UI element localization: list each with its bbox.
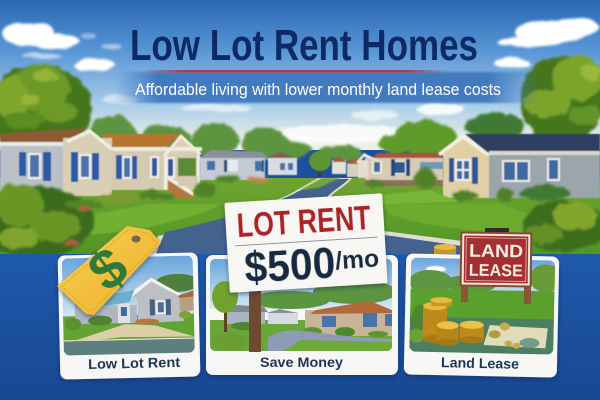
card: land lease bbox=[404, 253, 562, 378]
land lease sign bbox=[460, 228, 532, 304]
background tree line bbox=[88, 113, 525, 161]
title: Low Lot Rent Homes bbox=[130, 21, 478, 70]
card label: Land Lease bbox=[441, 354, 519, 372]
big tree left bbox=[0, 64, 92, 152]
coin stacks bbox=[422, 297, 484, 347]
sky background bbox=[0, 0, 600, 150]
subtitle: Affordable living with lower monthly land lease costs bbox=[135, 80, 501, 99]
lawn patches bbox=[72, 178, 545, 236]
lawn ground bbox=[0, 178, 600, 258]
card: low lot rent bbox=[58, 252, 201, 380]
far houses bbox=[198, 150, 366, 180]
sign heading: LOT RENT bbox=[236, 199, 372, 245]
sign post bbox=[249, 286, 261, 352]
card label: Low Lot Rent bbox=[88, 354, 181, 372]
subtitle band bbox=[115, 72, 540, 103]
sign text: LAND bbox=[469, 241, 523, 261]
house: left bbox=[0, 128, 202, 198]
lot rent sign: /mo bbox=[334, 245, 380, 275]
lower blue panel bbox=[0, 254, 600, 400]
land lease sign: LEASE bbox=[469, 261, 523, 280]
road bbox=[150, 178, 470, 256]
sign price: $500 bbox=[243, 238, 337, 293]
card label: Save Money bbox=[260, 354, 343, 370]
red accent line bbox=[140, 70, 450, 72]
house: right bbox=[438, 134, 600, 198]
card image: house bbox=[62, 255, 201, 356]
card image: coins on lawn bbox=[407, 257, 562, 356]
shrubs near houses bbox=[98, 167, 569, 203]
coins peeking behind card bbox=[434, 244, 456, 254]
clouds bbox=[2, 18, 599, 143]
card image: neighbourhood bbox=[210, 259, 397, 352]
lot rent sign bbox=[224, 193, 388, 294]
dollar sign: $ bbox=[76, 234, 139, 303]
house: centre right bbox=[356, 153, 443, 186]
big tree right bbox=[520, 56, 600, 144]
card: save money bbox=[206, 255, 398, 375]
large bush right bbox=[523, 200, 600, 252]
center small tree bbox=[309, 151, 331, 177]
large bush left bbox=[0, 184, 105, 258]
price tag icon bbox=[57, 226, 161, 315]
